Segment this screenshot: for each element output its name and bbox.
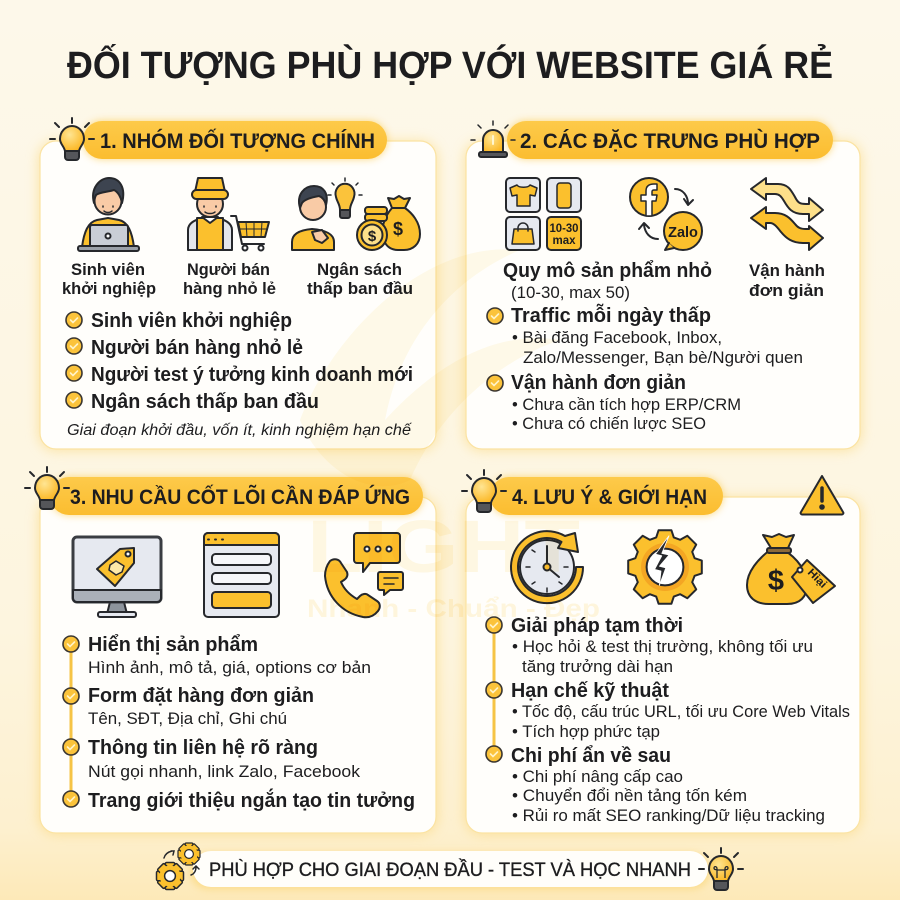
item: thông tin liên hệ xyxy=(63,737,361,781)
block: chi phí ẩn: • Chi phí nâng cấp cao xyxy=(512,768,683,786)
block: chi phí ẩn: • Rủi ro mất SEO ranking/Dữ liệu tracking xyxy=(512,807,825,825)
item: hiển thị sản phẩm xyxy=(63,634,371,677)
block: hạn chế kỹ thuật: • Tốc độ, cấu trúc URL, tối ưu Core Web Vitals xyxy=(512,703,850,721)
block: giải pháp tạm thời: tăng trưởng dài hạn xyxy=(522,658,673,676)
icon: cracked gear xyxy=(628,530,702,604)
item: hiển thị sản phẩm: Hình ảnh, mô tả, giá, options cơ bản xyxy=(88,658,371,677)
icon: footer bulb xyxy=(699,848,743,890)
icon: money bag with tag xyxy=(747,534,835,604)
icon: wavy arrows xyxy=(751,178,823,250)
block: chi phí ẩn: • Chuyển đổi nền tảng tốn kém xyxy=(512,787,747,805)
quy mô text xyxy=(503,260,712,302)
section header 1: 1. NHÓM ĐỐI TƯỢNG CHÍNH xyxy=(100,127,375,153)
block: chi phí ẩn: Chi phí ẩn về sau xyxy=(511,745,671,767)
panel: các đặc trưng phù hợp xyxy=(464,121,862,451)
icon labels: Người bán xyxy=(187,260,270,279)
section header 2 xyxy=(507,121,833,159)
block: giải pháp tạm thời: • Học hỏi & test thị trường, không tối ưu xyxy=(512,638,813,656)
vận hành label: đơn giản xyxy=(749,281,824,300)
traffic block: • Bài đăng Facebook, Inbox, xyxy=(512,328,722,347)
traffic block: Traffic mỗi ngày thấp xyxy=(511,303,711,327)
icon: light bulb 4 xyxy=(462,470,506,512)
icon: thinking person, bulb and money: $ xyxy=(393,219,403,239)
icon: seller with cart xyxy=(188,178,269,250)
italic note: Giai đoạn khởi đầu, vốn ít, kinh nghiệm hạn chế xyxy=(67,422,412,439)
block: chi phí ẩn xyxy=(486,745,825,825)
icon labels: Sinh viên xyxy=(71,260,145,279)
vận hành block: • Chưa có chiến lược SEO xyxy=(512,414,706,433)
icon: clock with arrow xyxy=(511,531,583,603)
item: thông tin liên hệ: Nút gọi nhanh, link Zalo, Facebook xyxy=(88,762,361,781)
icon: thinking person, bulb and money xyxy=(292,178,420,250)
icon: money bag with tag: Hiại xyxy=(805,567,829,591)
icon: monitor with price tag xyxy=(73,537,161,617)
item: thông tin liên hệ: Thông tin liên hệ rõ ràng xyxy=(88,737,318,759)
checklist: Người bán hàng nhỏ lẻ xyxy=(91,337,303,359)
traffic block xyxy=(487,303,803,367)
icon: warning triangle xyxy=(801,476,843,514)
item: form đặt hàng xyxy=(63,685,314,728)
traffic block: Zalo/Messenger, Bạn bè/Người quen xyxy=(523,348,803,367)
checklist: Người test ý tưởng kinh doanh mới xyxy=(91,364,413,386)
block: hạn chế kỹ thuật xyxy=(486,680,850,741)
vận hành label xyxy=(749,261,825,300)
icon labels: thấp ban đầu xyxy=(307,279,413,298)
section header 4: 4. LƯU Ý & GIỚI HẠN xyxy=(512,484,707,509)
icon: small product grid: 10-30 xyxy=(550,223,578,235)
item: trang giới thiệu: Trang giới thiệu ngắn tạo tin tưởng xyxy=(88,788,415,812)
icon: light bulb 1 xyxy=(50,118,94,160)
icon labels xyxy=(62,260,413,298)
icon: light bulb 3 xyxy=(25,467,69,509)
section header 4 xyxy=(490,477,723,515)
timeline xyxy=(63,634,415,812)
vận hành block: Vận hành đơn giản xyxy=(511,372,686,394)
title: ĐỐI TƯỢNG PHÙ HỢP VỚI WEBSITE GIÁ RẺ xyxy=(67,42,833,87)
watermark logo: LIGHT xyxy=(307,505,580,588)
vận hành block xyxy=(487,372,741,433)
quy mô text: Quy mô sản phẩm nhỏ xyxy=(503,260,712,282)
item: form đặt hàng: Tên, SĐT, Địa chỉ, Ghi chú xyxy=(88,709,287,728)
section header 1 xyxy=(83,121,387,159)
icon: small product grid: max xyxy=(552,235,576,247)
watermark logo: Nhanh - Chuẩn - Đẹp xyxy=(307,595,600,623)
checklist: Ngân sách thấp ban đầu xyxy=(91,391,319,413)
vận hành block: • Chưa cần tích hợp ERP/CRM xyxy=(512,395,741,414)
icon labels: Ngân sách xyxy=(317,260,402,279)
quy mô text: (10-30, max 50) xyxy=(511,284,630,302)
footer banner: PHÙ HỢP CHO GIAI ĐOẠN ĐẦU - TEST VÀ HỌC NHANH xyxy=(209,858,691,881)
block: hạn chế kỹ thuật: • Tích hợp phức tạp xyxy=(512,723,660,741)
icon labels: hàng nhỏ lẻ xyxy=(183,279,276,298)
icon: order form xyxy=(204,533,279,617)
checklist xyxy=(66,310,413,413)
checklist: Sinh viên khởi nghiệp xyxy=(91,310,292,332)
item: hiển thị sản phẩm: Hiển thị sản phẩm xyxy=(88,634,258,656)
icon: student with laptop xyxy=(78,178,139,251)
panel: lưu ý và giới hạn xyxy=(462,470,862,835)
block: giải pháp tạm thời: Giải pháp tạm thời xyxy=(511,615,683,637)
icon: facebook and zalo cycle xyxy=(630,178,702,250)
footer banner xyxy=(156,843,743,890)
section header 3: 3. NHU CẦU CỐT LÕI CẦN ĐÁP ỨNG xyxy=(70,483,410,509)
panel: nhu cầu cốt lõi xyxy=(25,467,438,835)
section header 3 xyxy=(50,477,423,515)
icon: gears xyxy=(156,843,200,890)
item: form đặt hàng: Form đặt hàng đơn giản xyxy=(88,685,314,707)
icon: money bag with tag: $ xyxy=(768,565,784,597)
icon: siren xyxy=(471,121,515,157)
section header 2: 2. CÁC ĐẶC TRƯNG PHÙ HỢP xyxy=(520,128,820,153)
panel: nhóm đối tượng chính xyxy=(38,118,438,451)
icon: facebook and zalo cycle: Zalo xyxy=(668,225,698,241)
vận hành label: Vận hành xyxy=(749,261,825,280)
block: hạn chế kỹ thuật: Hạn chế kỹ thuật xyxy=(511,680,669,702)
icon: small product grid xyxy=(506,178,581,250)
watermark logo xyxy=(300,249,600,623)
icon labels: khởi nghiệp xyxy=(62,279,156,298)
icon: phone and chat bubbles xyxy=(325,533,403,617)
icon: thinking person, bulb and money: $ xyxy=(368,228,377,245)
block: giải pháp tạm thời xyxy=(486,615,813,754)
